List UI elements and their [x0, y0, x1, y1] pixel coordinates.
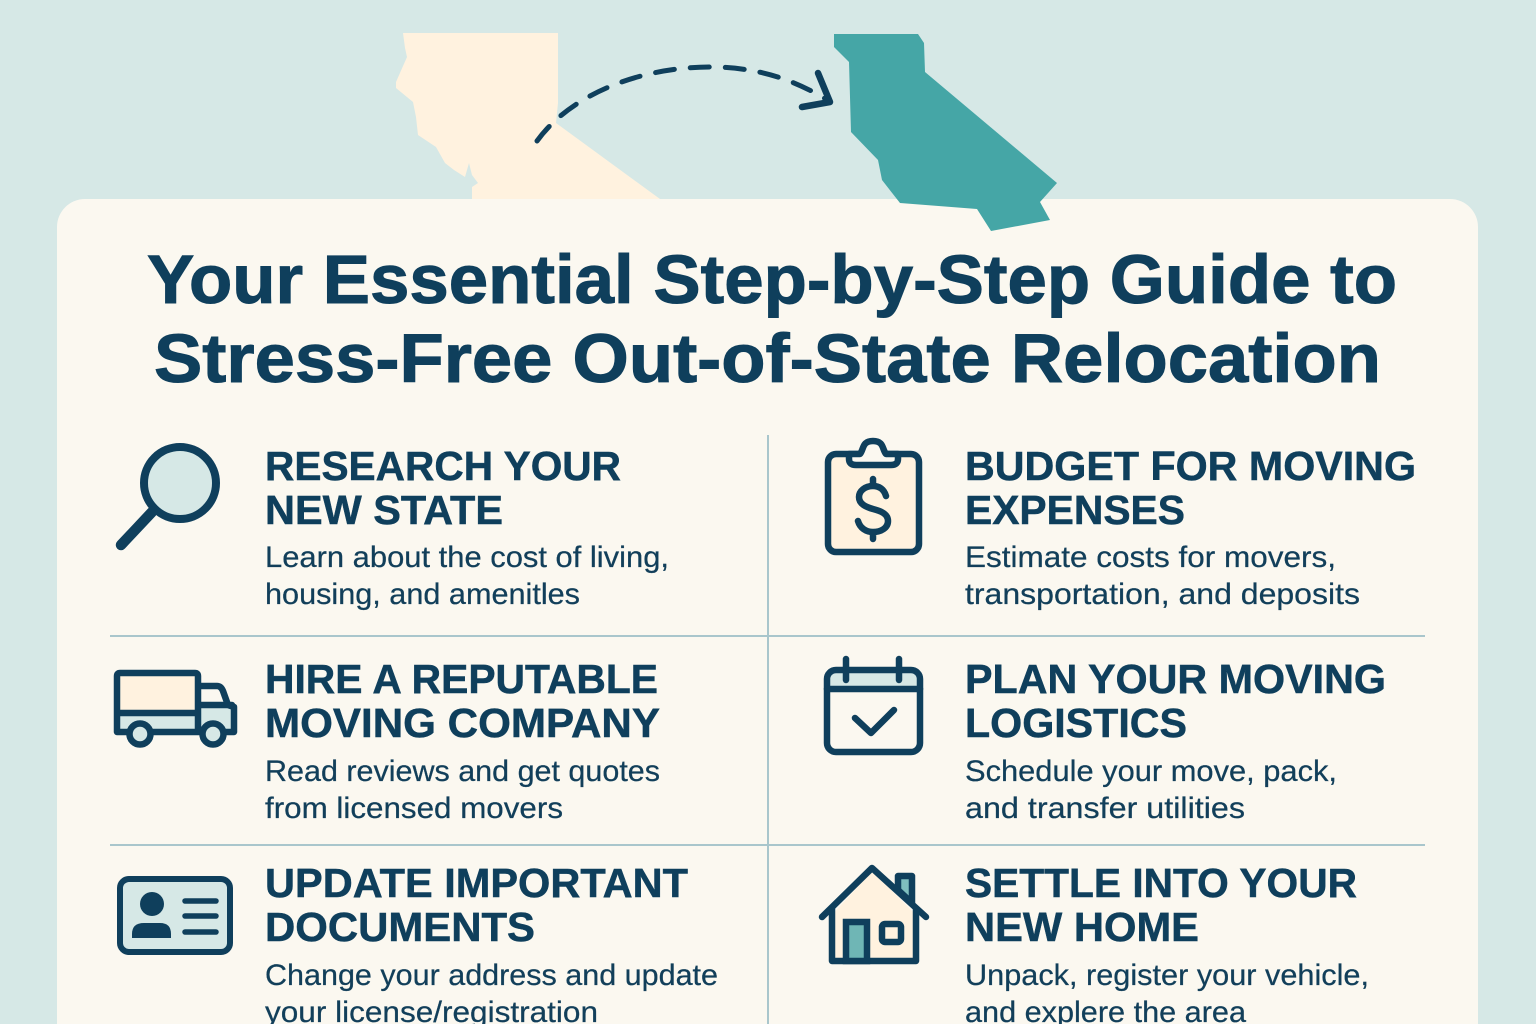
step: budget for moving expenses: Estimate costs for movers, [965, 541, 1336, 574]
step: research your new state [265, 443, 669, 611]
step: hire a reputable moving company: HIRE A REPUTABLE [265, 656, 658, 702]
step: hire a reputable moving company: from licensed movers [265, 792, 563, 825]
step: settle into your new home: Unpack, register your vehicle, [965, 959, 1369, 992]
step: plan your moving logistics: and transfer utilities [965, 792, 1245, 825]
step: hire a reputable moving company [265, 656, 660, 825]
step: plan your moving logistics: LOGISTICS [965, 700, 1187, 746]
step: budget for moving expenses: BUDGET FOR MOVING [965, 443, 1416, 489]
step: hire a reputable moving company: Read reviews and get quotes [265, 755, 660, 788]
dividers [110, 435, 1425, 1024]
title: Your Essential Step-by-Step Guide to [147, 241, 1397, 318]
step: research your new state: Learn about the cost of living, [265, 541, 669, 574]
arrow: dashed move path [537, 67, 830, 141]
step: settle into your new home: NEW HOME [965, 904, 1199, 950]
step: update important documents: DOCUMENTS [265, 904, 535, 950]
step: settle into your new home [965, 860, 1369, 1024]
step: plan your moving logistics: Schedule your move, pack, [965, 755, 1337, 788]
step: settle into your new home: SETTLE INTO YOUR [965, 860, 1357, 906]
icon: ID card [120, 879, 230, 952]
icon: house [822, 868, 926, 961]
card background [57, 199, 1478, 1024]
step: plan your moving logistics: PLAN YOUR MOVING [965, 656, 1386, 702]
step: update important documents: Change your address and update [265, 959, 718, 992]
step: update important documents: UPDATE IMPORTANT [265, 860, 688, 906]
step: update important documents [265, 860, 718, 1024]
step: budget for moving expenses [965, 443, 1416, 611]
step: research your new state: housing, and amenitles [265, 578, 580, 611]
step: research your new state: RESEARCH YOUR [265, 443, 621, 489]
map: destination state [834, 34, 1057, 231]
title: Stress-Free Out-of-State Relocation [154, 320, 1381, 397]
icon: calendar with checkmark [827, 659, 920, 752]
icon: magnifying glass [121, 447, 216, 545]
step: plan your moving logistics [965, 656, 1386, 825]
icon: budget clipboard [828, 441, 919, 552]
step: research your new state: NEW STATE [265, 487, 503, 533]
icon: moving truck [117, 673, 234, 744]
step: budget for moving expenses: transportation, and deposits [965, 578, 1360, 611]
step: budget for moving expenses: EXPENSES [965, 487, 1185, 533]
title [147, 241, 1397, 397]
map: origin state [396, 33, 660, 215]
step: hire a reputable moving company: MOVING COMPANY [265, 700, 660, 746]
